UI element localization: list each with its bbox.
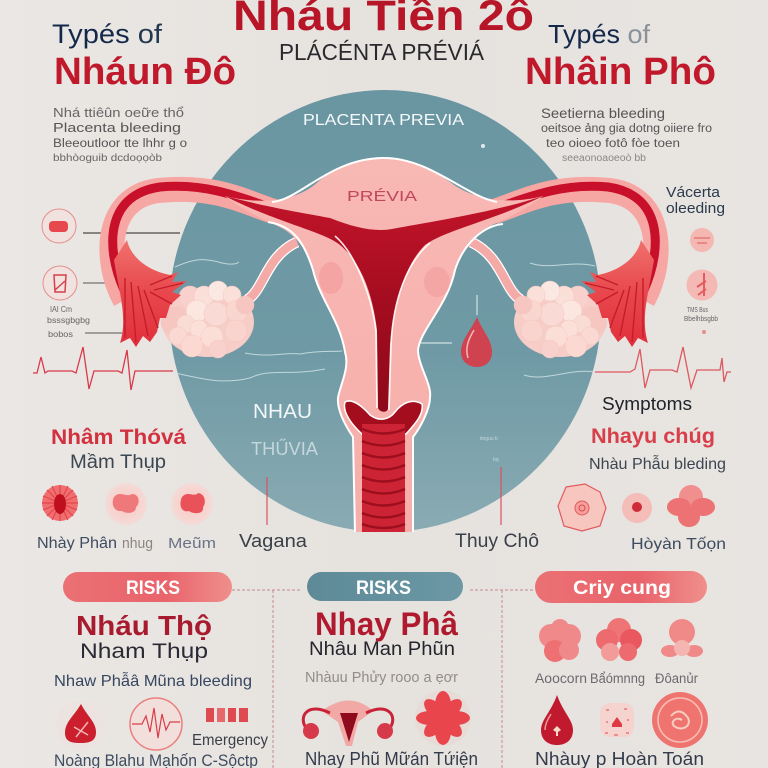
icon: left top circle <box>42 209 76 243</box>
left tube and ovary <box>112 186 297 358</box>
labels: lower right <box>455 531 726 553</box>
small text right: TMS Bus <box>687 305 708 314</box>
body text: Nhaw Phẫâ Mũna bleeding <box>54 671 252 690</box>
icon: flower 3 <box>661 619 703 657</box>
label: nhau: NHAU <box>253 401 312 423</box>
icon: drop <box>56 701 104 749</box>
label: thuvia: THŰVIA <box>251 438 318 459</box>
text block: types left: Nháun Đô <box>54 51 236 93</box>
texture spots <box>319 262 343 294</box>
vertical pointers <box>267 467 501 525</box>
pill: cruy cung <box>535 571 707 603</box>
pill: risks <box>307 572 463 601</box>
icon: tissue circle 1 <box>105 483 147 525</box>
subheading: Nham Thụp <box>80 640 208 663</box>
label: emergency: Emergency <box>192 732 268 749</box>
labels: flowers <box>535 671 698 686</box>
text block: types left: Placenta bleeding <box>53 121 181 135</box>
text block: types left: bbhòoguib dcdoọọòb <box>53 152 162 164</box>
text block: types right: Seetierna bleeding <box>541 105 665 121</box>
small labels in circle <box>480 436 499 463</box>
icon: small uterus <box>303 700 393 746</box>
panel: right column <box>535 571 708 768</box>
diagram: uterus <box>112 158 656 532</box>
icon: flower 1 <box>539 619 581 662</box>
icon: red flower <box>415 690 471 746</box>
text block: types left: Typés of <box>52 19 163 49</box>
text block: symptoms <box>589 394 726 473</box>
small text right <box>684 305 718 334</box>
text block: symptoms: Nhayu chúg <box>591 425 715 448</box>
uterine cavity <box>225 196 543 412</box>
labels: lower left icons: nhug <box>122 535 153 552</box>
connector lines left <box>83 233 180 333</box>
pill: risks <box>63 572 232 602</box>
chart: ecg left <box>33 347 173 390</box>
text block: nham thova: Mầm Thụp <box>70 452 166 473</box>
chart: ecg right <box>595 347 731 388</box>
small labels in circle: bq <box>493 457 499 463</box>
wavy lines <box>175 260 595 381</box>
dashed connectors <box>232 590 535 768</box>
small labels in circle: itnguu b <box>480 436 498 442</box>
small text left <box>47 305 90 339</box>
small white dot <box>481 144 485 148</box>
text block: types right: seeaonoaoeoò bb <box>562 153 646 164</box>
text block: nham thova <box>51 426 186 473</box>
small text left: IAI Cm <box>50 305 72 314</box>
subheading: Nhâu Man Phũn <box>309 639 455 660</box>
vaginal canal <box>344 401 422 532</box>
labels: flowers: Bẩómnng <box>590 671 645 686</box>
small text left: bobos <box>48 330 73 339</box>
right tube and ovary <box>471 186 656 358</box>
text block: types right: Nhâin Phô <box>525 51 716 93</box>
text block: symptoms: Nhàu Phẫu bleding <box>589 454 726 473</box>
text block: vacerta bleeding: Vácerta <box>666 185 721 201</box>
icon: right second circle <box>686 270 718 300</box>
labels: lower left icons <box>37 531 308 552</box>
white edge of body <box>268 158 503 532</box>
body text: Nhàuu Phửy rooo a ẹơr <box>305 669 458 686</box>
heading: Nháu Thộ <box>76 610 212 641</box>
uterus body <box>225 158 543 532</box>
icon: blocks <box>206 708 248 722</box>
labels: lower right: Hòyàn Tốọn <box>631 536 726 553</box>
text block: types right <box>525 19 716 164</box>
icon: round seal <box>652 692 708 748</box>
icon: big drop <box>541 695 573 745</box>
icon: pink flower <box>667 485 715 527</box>
text block: types right: oeitsoe ảng gia dotng oiiere fro <box>541 123 712 135</box>
icon: waveform <box>130 698 182 750</box>
icon: left second circle <box>43 266 77 300</box>
icon: blood drop <box>420 295 492 367</box>
text block: types right: teo oioeo fotô fòe toen <box>546 138 680 150</box>
icon: red burst <box>42 485 78 521</box>
heading: Nhay Phâ <box>315 606 458 642</box>
text block: nham thova: Nhâm Thóvá <box>51 426 186 449</box>
icon: rose <box>558 484 606 531</box>
small text right: Bbelhbsgbb <box>684 314 718 323</box>
labels: flowers: Aoocorn <box>535 671 587 686</box>
icon: flower 2 <box>596 618 642 661</box>
icon: right top circle <box>690 228 714 252</box>
text block: types left: Nhá ttiêûn oeữe thổ <box>53 106 184 120</box>
panel: risks left <box>54 572 268 768</box>
text block: types right: Typés of <box>548 19 651 49</box>
pill: risks: RISKS <box>126 578 180 599</box>
labels: flowers: Đôanủr <box>655 671 698 686</box>
labels: lower left icons: Meũm <box>168 535 216 552</box>
label: previa: PRÉVIA <box>347 188 417 205</box>
wall highlight lines <box>335 236 430 410</box>
labels: lower left icons: Vagana <box>239 531 308 551</box>
icon: speckle <box>600 703 634 737</box>
pill: cruy cung: Criy cung <box>573 578 671 599</box>
panel: risks middle <box>303 572 478 768</box>
icon: small circle <box>622 493 652 523</box>
labels: lower right: Thuy Chô <box>455 531 539 552</box>
text block: vacerta bleeding <box>666 185 725 217</box>
text block: types left: Bleeoutloor tte lhhr g o <box>53 138 187 150</box>
small text left: bsssgbgbg <box>47 316 90 325</box>
labels: lower left icons: Nhày Phân <box>37 535 117 552</box>
label: placenta previa: PLACENTA PREVIA <box>303 112 464 129</box>
text block: types left <box>52 19 236 164</box>
pill: risks: RISKS <box>356 578 411 599</box>
subtitle: PLÁCÉNTA PRÉVIÁ <box>279 39 485 65</box>
icon: tissue circle 2 <box>171 483 213 525</box>
panel: teal circle <box>169 90 601 532</box>
text block: symptoms: Symptoms <box>602 394 692 414</box>
text block: vacerta bleeding: oleeding <box>666 201 725 217</box>
